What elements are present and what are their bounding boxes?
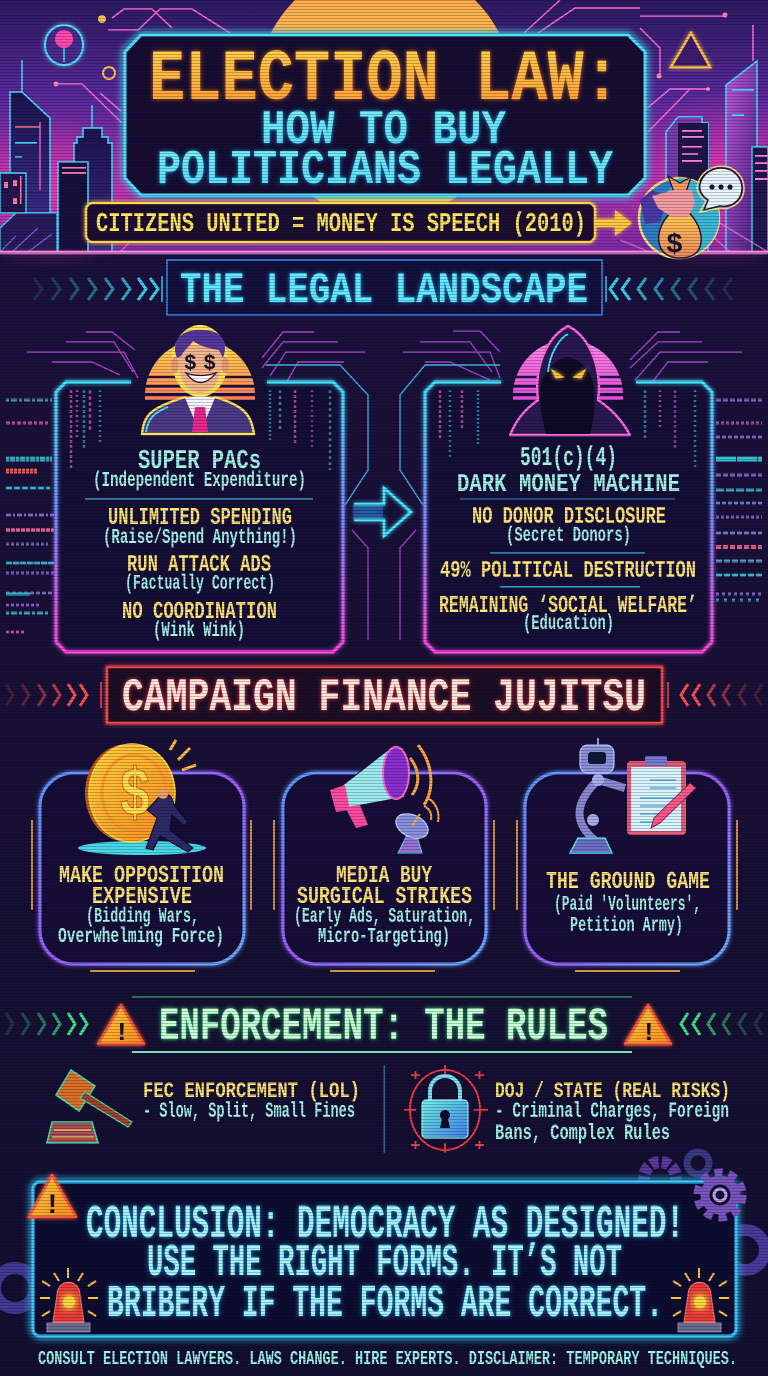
card heading: THE GROUND GAME [546,869,710,896]
icon: gear [698,1173,742,1217]
item: run attack ads: RUN ATTACK ADS [127,552,271,579]
icon: hooded figure [510,326,630,435]
item: no coordination: (Wink Wink) [153,620,245,643]
chevrons: campaign finance left [6,682,101,708]
card detail: Overwhelming Force) [58,926,224,949]
title line 2: HOW TO BUY [261,104,506,158]
panel: super pacs [56,382,343,652]
horizon line [0,251,768,254]
card heading [297,863,472,911]
icon: robot with clipboard [570,738,696,853]
panel: conclusion [33,1182,736,1336]
panel subtitle: (Independent Expenditure) [93,470,306,493]
item: run attack ads [125,552,275,596]
icon: padlock with target [404,1065,488,1153]
panel: the ground game [516,738,738,972]
text: fec enforcement: FEC ENFORCEMENT (LOL) [143,1079,360,1104]
icon: smiling politician with dollar eyes [142,325,255,434]
item: unlimited spending [103,505,297,550]
title panel [125,35,645,195]
card detail: Petition Army) [570,915,683,938]
panel: 501c4 dark money [425,382,712,652]
circuit traces [27,331,742,640]
data rain columns [71,390,330,470]
heading: the legal landscape: THE LEGAL LANDSCAPE [180,266,588,316]
text: doj state [495,1079,730,1146]
heading: enforcement the rules: ENFORCEMENT: THE RULES [159,1001,608,1053]
divider [500,586,640,588]
card detail [294,906,475,949]
enforcement divider [384,1065,385,1153]
item: no donor disclosure: (Secret Donors) [506,525,631,548]
chevrons: legal landscape right [606,276,732,302]
card heading: EXPENSIVE [92,884,192,911]
arrow: super pacs to dark money [353,488,411,536]
divider [490,552,645,554]
panel: media buy surgical strikes [273,745,495,972]
heading: campaign finance jujitsu: CAMPAIGN FINANCE JUJITSU [122,672,646,724]
panel title: SUPER PACs [138,447,261,477]
item: no donor disclosure [472,504,666,548]
divider [85,498,313,500]
card heading: MAKE OPPOSITION [59,863,224,890]
card heading: MEDIA BUY [336,863,432,890]
arrow: to money bag [596,210,632,236]
card heading [59,863,224,911]
item: unlimited spending: (Raise/Spend Anything!) [103,527,297,550]
card detail [554,894,701,938]
data streams left [6,400,54,632]
icon: warning triangle left [98,1005,144,1048]
left towers [10,92,112,252]
divider [460,498,675,500]
right towers [666,117,708,252]
citizens united callout: CITIZENS UNITED = MONEY IS SPEECH (2010) [96,210,586,240]
text: fec enforcement: - Slow, Split, Small Fines [143,1099,355,1124]
side lights [516,820,738,972]
card heading: SURGICAL STRIKES [297,884,472,911]
floor grid [120,205,768,252]
icon: coin pushed by person [78,740,206,855]
card detail: Micro-Targeting) [318,926,450,949]
data rain columns [440,390,695,470]
traces [55,0,725,135]
icon: coin pushed by person: $ [119,759,151,836]
icon: neon balloon orb [45,25,83,65]
icon: neon triangle [671,33,710,67]
citizens united callout [86,203,595,242]
background gears [0,1152,765,1308]
item: no donor disclosure: NO DONOR DISCLOSURE [472,504,666,531]
icon: money bag with speech bubble: $ [666,231,683,261]
item: run attack ads: (Factually Correct) [125,573,275,596]
item: remaining social welfare: (Education) [523,613,614,636]
icon: warning triangle right [625,1005,671,1048]
panel subtitle: DARK MONEY MACHINE [457,469,680,499]
icon: smiling politician with dollar eyes: $$ [184,353,216,376]
header city skyline scene [0,0,768,270]
icon: warning triangle left: ! [114,1018,130,1048]
title line 1: ELECTION LAW: [149,39,620,121]
card detail [58,906,224,949]
text: fec enforcement [143,1079,360,1124]
icon: money bag with speech bubble [639,166,744,261]
data streams right [716,400,762,600]
icon: gavel [47,1070,132,1143]
title line 3: POLITICIANS LEGALLY [157,144,613,198]
chevrons: campaign finance right [668,682,762,708]
side lights [31,820,252,972]
icon: warning triangle right: ! [641,1018,657,1048]
card detail: (Bidding Wars, [86,906,199,929]
chevrons: legal landscape left [34,276,162,302]
icon: siren left [40,1268,98,1332]
icon: siren right [671,1268,729,1332]
card detail: (Early Ads, Saturation, [294,906,475,929]
panel: make opposition expensive [31,740,252,972]
item: no coordination: NO COORDINATION [122,599,277,626]
chevrons: enforcement right [681,1013,762,1035]
icon: neon ring nodes [99,16,115,79]
icon: megaphone and satellite dish [330,745,439,853]
icon: warning triangle conclusion: ! [44,1191,61,1222]
item: remaining social welfare [439,593,697,636]
icon: warning triangle conclusion [29,1175,76,1222]
item: unlimited spending: UNLIMITED SPENDING [108,505,292,532]
panel title: 501(c)(4) [520,444,617,474]
side lights [273,820,495,972]
text: doj state: Bans, Complex Rules [495,1121,670,1146]
item: no coordination [122,599,277,643]
chevrons: enforcement left [6,1013,87,1035]
